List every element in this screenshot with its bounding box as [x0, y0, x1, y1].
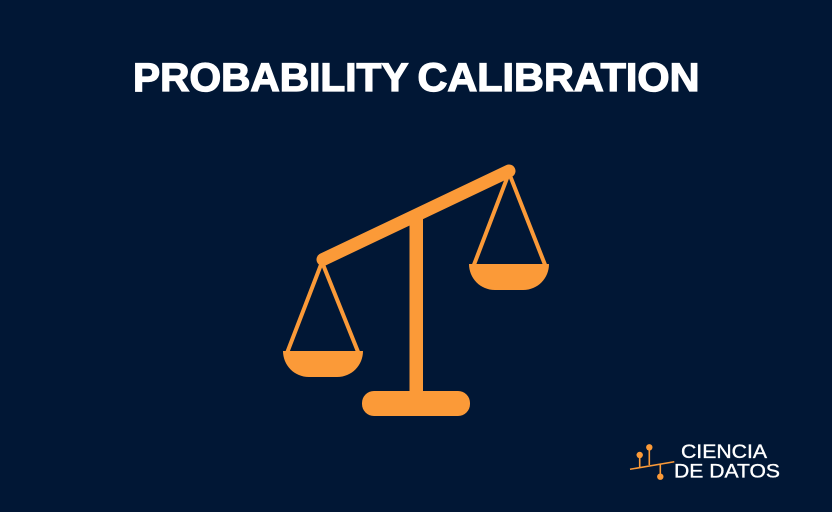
- title: PROBABILITY: [133, 56, 409, 100]
- right pan: [469, 264, 549, 290]
- logo text line 2: DE DATOS: [674, 462, 780, 482]
- logo icon: [630, 444, 674, 480]
- right pan strings: [474, 173, 546, 266]
- left pan: [283, 351, 363, 377]
- scale beam: [323, 171, 509, 260]
- logo: Ciencia de Datos: [630, 442, 780, 482]
- icon: balance scale: [283, 171, 549, 416]
- title: [133, 56, 700, 100]
- scale post: [410, 215, 423, 395]
- left pan strings: [287, 262, 358, 353]
- scale base: [362, 391, 470, 416]
- title: CALIBRATION: [418, 56, 700, 100]
- logo text line 1: CIENCIA: [681, 442, 767, 463]
